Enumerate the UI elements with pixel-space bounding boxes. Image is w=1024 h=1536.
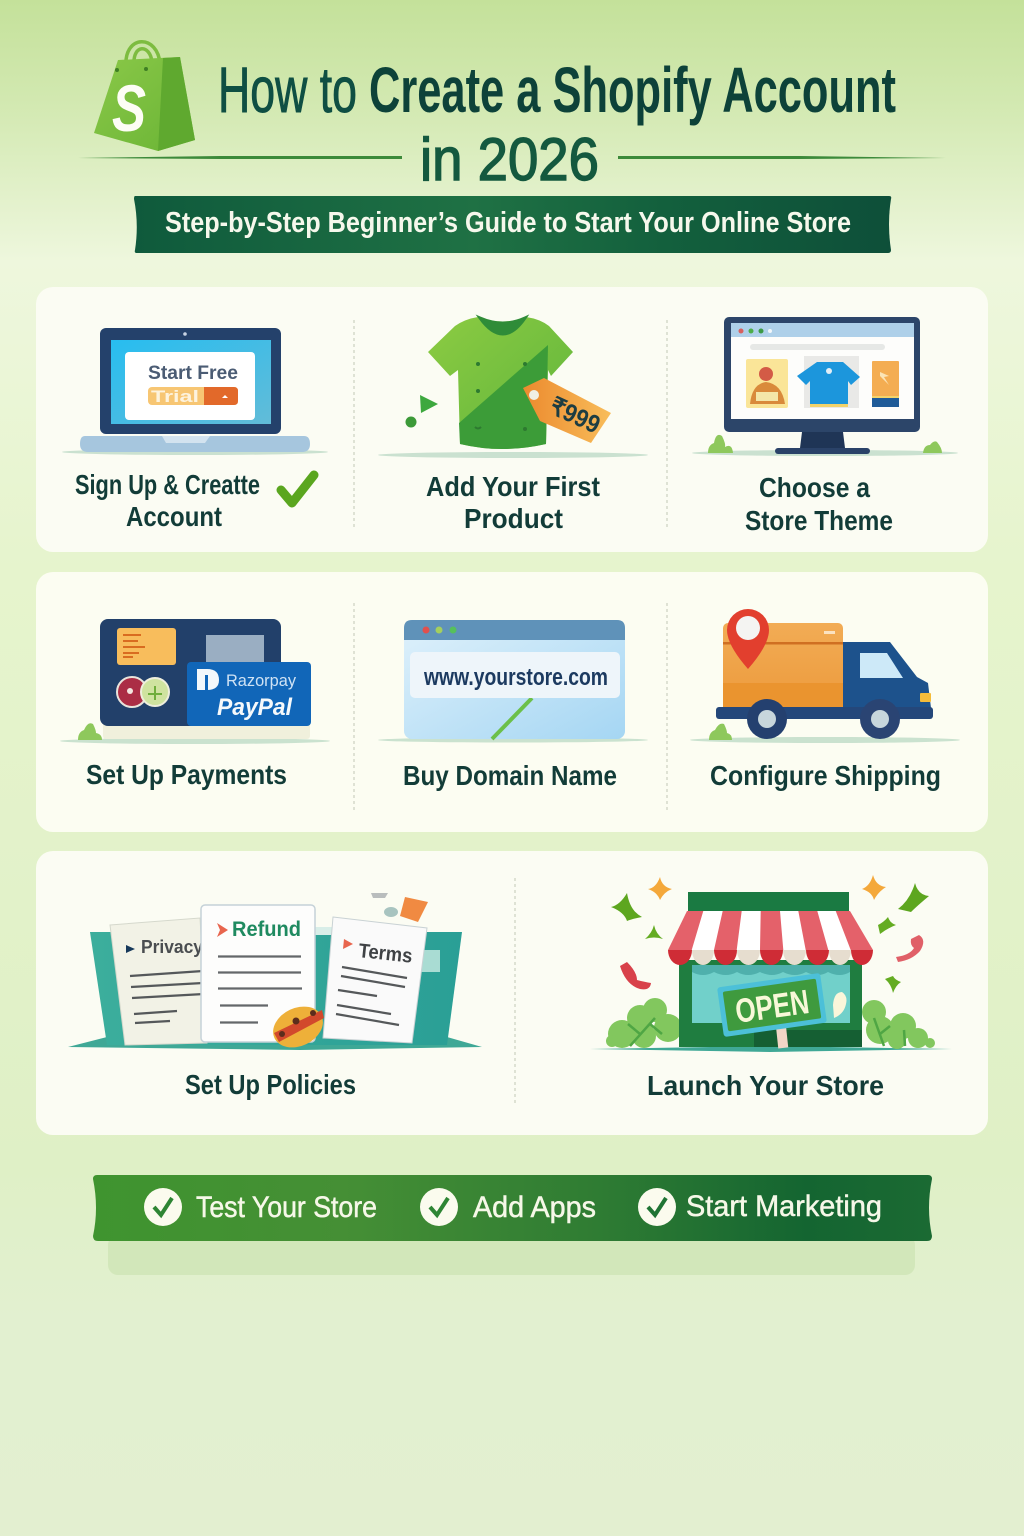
icon: plant left	[708, 435, 733, 453]
label: Choose a Store Theme	[745, 472, 893, 536]
icon: green t-shirt with price tag: ₹999	[545, 392, 604, 439]
left title rule	[78, 156, 402, 159]
label: Buy Domain Name: Buy Domain Name	[403, 760, 617, 791]
icon: policy documents: Privacy	[141, 937, 203, 957]
icon: policy documents: Refund	[232, 918, 301, 941]
icon: storefront with open sign	[668, 892, 873, 1048]
check item: start marketing: Start Marketing	[686, 1190, 882, 1223]
label: Choose a Store Theme: Choose a	[759, 472, 870, 503]
step: set up payments	[60, 619, 330, 790]
label: Launch Your Store: Launch Your Store	[647, 1070, 884, 1101]
label: Set Up Policies: Set Up Policies	[185, 1069, 356, 1100]
step: set up policies	[68, 893, 482, 1100]
step: configure shipping	[690, 609, 960, 791]
label: Add Your First Product	[426, 471, 600, 534]
footer banner: next steps	[93, 1175, 932, 1275]
check item: test your store: Test Your Store	[196, 1191, 377, 1224]
subtitle ribbon	[134, 196, 891, 253]
label: Sign Up & Creatte Account	[75, 469, 260, 532]
panel: second row of steps	[36, 572, 988, 832]
icon: plant	[709, 724, 732, 740]
icon: payment dashboard	[100, 619, 311, 739]
panel: first row of steps	[36, 287, 988, 552]
icon: policy documents	[68, 893, 482, 1055]
icon: confetti and sparkles	[611, 875, 929, 993]
icon: Shopify bag logo: S	[112, 71, 146, 145]
label: Add Your First Product: Add Your First	[426, 471, 600, 502]
check item: test your store	[144, 1188, 377, 1226]
icon: storefront with open sign: OPEN	[733, 983, 812, 1031]
check item: start marketing	[638, 1188, 882, 1226]
step: launch your store	[590, 875, 952, 1101]
icon: laptop	[80, 328, 310, 452]
icon: green t-shirt with price tag	[406, 317, 611, 449]
right title rule	[618, 156, 946, 159]
title line one: How to	[218, 54, 357, 126]
icon: browser window with domain	[404, 620, 625, 739]
label: Sign Up & Creatte Account: Sign Up & Creatte	[75, 469, 260, 500]
icon: laptop: Trial	[151, 387, 199, 406]
icon: plant	[78, 723, 102, 740]
step: buy domain name	[378, 620, 648, 791]
check item: add apps	[420, 1188, 596, 1226]
step: sign up and create account	[62, 328, 328, 532]
icon: payment dashboard: PayPal	[217, 694, 293, 721]
icon: browser window with domain: www.yourstore.com	[423, 664, 608, 691]
step: choose a store theme	[692, 317, 958, 536]
icon: plant right	[923, 441, 942, 453]
icon: check mark	[281, 475, 314, 503]
title line two: in 2026	[420, 126, 599, 193]
panel: third row of steps	[36, 851, 988, 1135]
step: add your first product	[378, 317, 648, 534]
label: Set Up Payments: Set Up Payments	[86, 759, 287, 790]
icon: policy documents: Terms	[357, 940, 413, 968]
check item: add apps: Add Apps	[473, 1191, 596, 1224]
label: Configure Shipping: Configure Shipping	[710, 760, 941, 791]
icon: delivery truck with pin	[716, 609, 933, 739]
label: Choose a Store Theme: Store Theme	[745, 505, 893, 536]
label: Add Your First Product: Product	[464, 503, 563, 534]
icon: Shopify bag logo	[94, 42, 195, 151]
label: Sign Up & Creatte Account: Account	[126, 501, 222, 532]
header: logo and title	[78, 42, 946, 193]
icon: laptop: Start Free	[148, 363, 238, 384]
subtitle ribbon: Step-by-Step Beginner’s Guide to Start Your Online Store	[165, 207, 851, 239]
icon: bushes	[590, 998, 952, 1052]
icon: payment dashboard: Razorpay	[226, 671, 296, 690]
icon: desktop monitor with store theme	[724, 317, 920, 454]
